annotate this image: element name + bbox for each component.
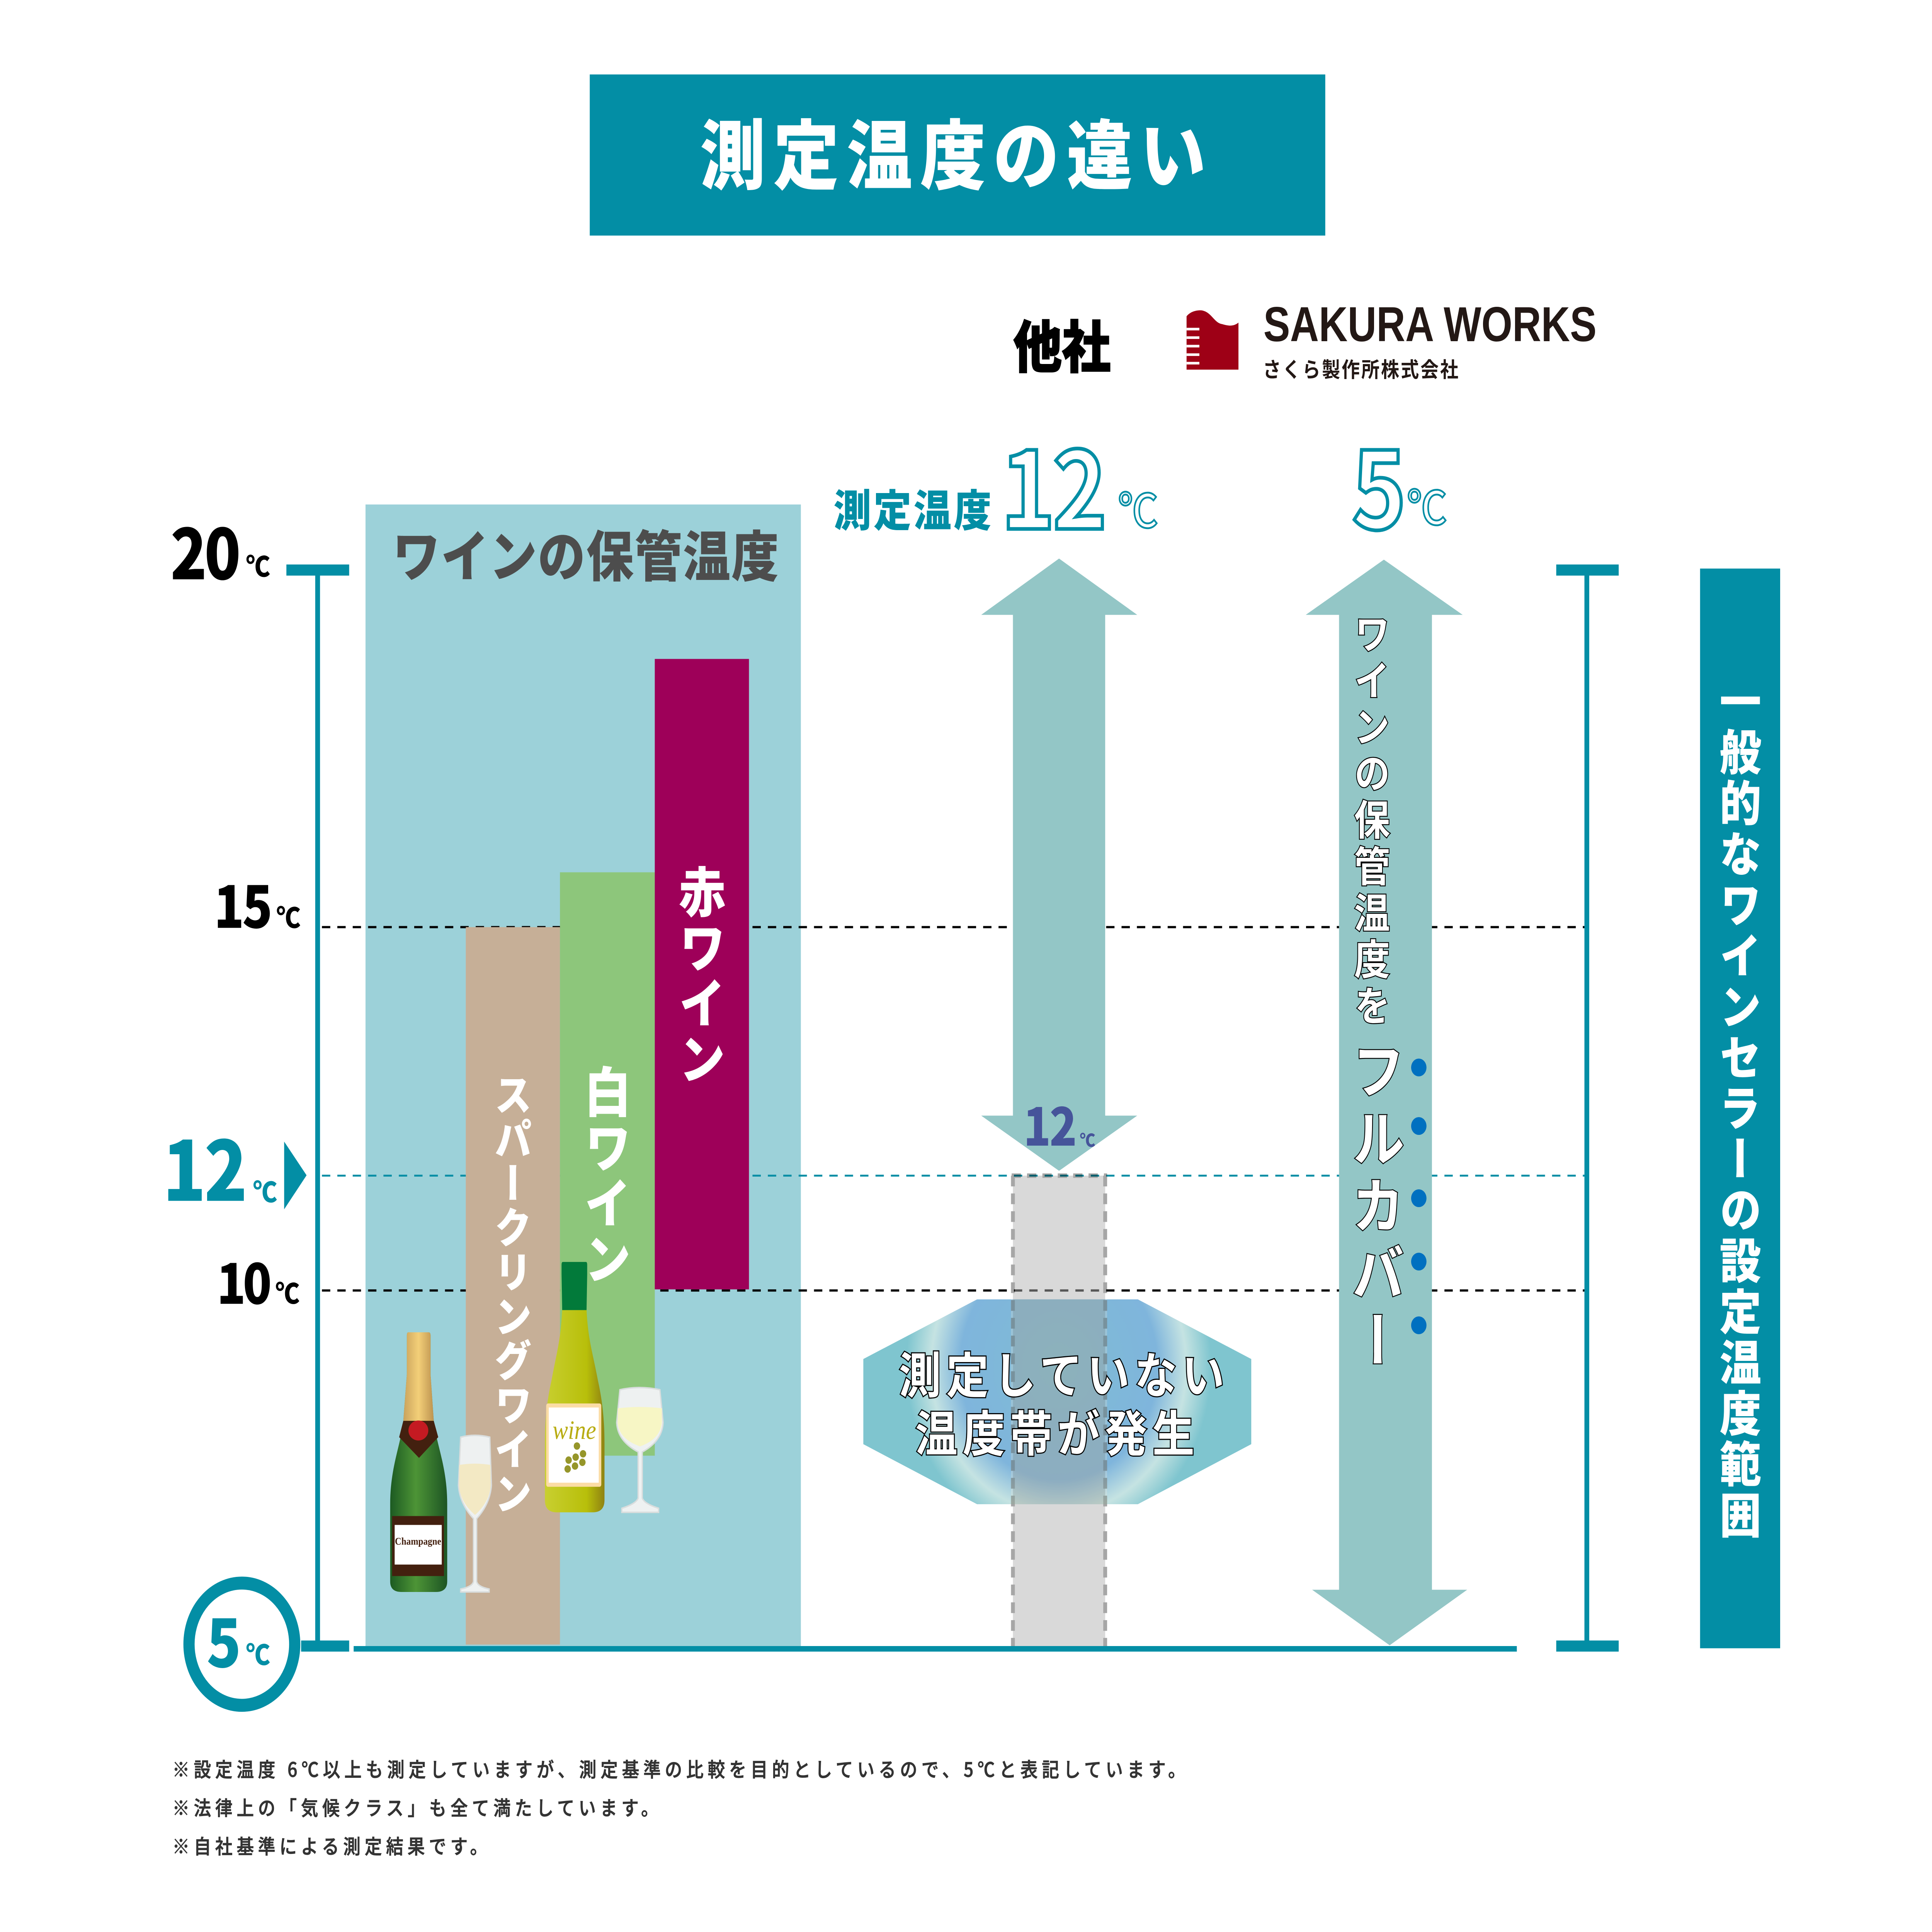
measured temperature label: other company: 測定温度 bbox=[833, 476, 994, 539]
axis label: 12 degrees: 12 bbox=[163, 1106, 245, 1225]
label: red wine: 赤ワイン bbox=[668, 864, 736, 1087]
unmeasured column bbox=[1012, 1176, 1107, 1646]
axis label: 5 degrees circle: ℃ bbox=[246, 1633, 270, 1673]
measured temperature label: Sakura Works: ℃ bbox=[1407, 471, 1447, 538]
title: 測定温度の違い bbox=[700, 95, 1213, 205]
column overlap tint over hexagon bbox=[1011, 1299, 1107, 1504]
callout: unmeasured band text bbox=[899, 1337, 1230, 1466]
axis label: 15 degrees bbox=[214, 862, 301, 945]
column overlap tint over 10 degree line bbox=[1015, 1289, 1103, 1292]
measured temperature label: Sakura Works bbox=[1352, 406, 1447, 560]
label: 12 degrees in arrow: 12 bbox=[1024, 1086, 1076, 1161]
label: sparkling wine: スパークリングワイン bbox=[486, 1073, 540, 1516]
axis label: 12 degrees: ℃ bbox=[253, 1170, 277, 1211]
bar: red wine bbox=[655, 659, 749, 1289]
callout: unmeasured band text: 測定していない bbox=[899, 1337, 1230, 1408]
label: 12 degrees in arrow: ℃ bbox=[1080, 1126, 1095, 1152]
axis label: 15 degrees: 15 bbox=[214, 862, 270, 945]
measured temperature label: other company: ℃ bbox=[1118, 474, 1158, 541]
right banner: 一般的なワインセラーの設定温度範囲 bbox=[1710, 677, 1770, 1541]
label: full cover text: フルカバー bbox=[1340, 1040, 1417, 1377]
right axis bbox=[1556, 565, 1619, 1651]
logo: SAKURA WORKS bbox=[1187, 297, 1597, 383]
label: full cover text: ワインの保管温度を bbox=[1346, 613, 1398, 1031]
logo wordmark: SAKURA WORKS bbox=[1264, 297, 1597, 352]
axis label: 5 degrees circle: 5 bbox=[207, 1591, 241, 1686]
axis label: 20 degrees: ℃ bbox=[246, 545, 270, 585]
measured temperature label: Sakura Works: 5 bbox=[1352, 406, 1406, 560]
icon: champagne bottle: Champagne bbox=[395, 1536, 441, 1547]
heading: other companies: 他社 bbox=[1013, 303, 1111, 384]
label: full cover text bbox=[1340, 613, 1417, 1377]
footnotes: ※自社基準による測定結果です。 bbox=[172, 1831, 492, 1860]
icon: champagne bottle bbox=[390, 1332, 447, 1592]
measured temperature label: other company: 12 bbox=[1001, 406, 1104, 560]
footnotes: ※設定温度 6℃以上も測定していますが、測定基準の比較を目的としているので、5℃と表記しています。 bbox=[172, 1753, 1190, 1782]
icon: white wine bottle: wine bbox=[553, 1415, 596, 1445]
label: white wine: 白ワイン bbox=[574, 1065, 642, 1287]
bar: white wine bbox=[560, 872, 655, 1456]
title bbox=[590, 75, 1325, 236]
axis label: 20 degrees: 20 bbox=[170, 500, 239, 600]
dashed line: 12 degrees bbox=[322, 1175, 1587, 1177]
hexagon: unmeasured temperature band bbox=[863, 1299, 1251, 1504]
axis label: 5 degrees circle bbox=[189, 1583, 295, 1705]
axis label: 10 degrees: ℃ bbox=[276, 1272, 299, 1312]
axis label: 12 degrees bbox=[163, 1106, 306, 1225]
bar: sparkling wine bbox=[466, 927, 560, 1645]
footnotes bbox=[172, 1753, 1190, 1860]
axis label: 10 degrees: 10 bbox=[217, 1241, 270, 1320]
icon: white wine glass bbox=[617, 1388, 663, 1512]
axis label: 20 degrees bbox=[170, 500, 270, 600]
measured temperature label: other company bbox=[833, 406, 1158, 560]
arrow: other company range bbox=[981, 559, 1137, 1171]
icon: champagne flute bbox=[458, 1435, 492, 1592]
right banner bbox=[1700, 568, 1780, 1648]
callout: unmeasured band text: 温度帯が発生 bbox=[915, 1395, 1200, 1466]
logo mark bbox=[1187, 310, 1238, 370]
left axis bbox=[286, 565, 349, 1651]
axis label: 10 degrees bbox=[217, 1241, 299, 1320]
baseline bbox=[354, 1646, 1517, 1651]
panel: wine storage temperature background bbox=[366, 505, 801, 1646]
panel heading: ワインの保管温度 bbox=[393, 513, 780, 592]
dashed line: 15 degrees bbox=[322, 926, 1587, 928]
axis label: 15 degrees: ℃ bbox=[276, 896, 301, 936]
dashed line: 10 degrees bbox=[322, 1289, 1587, 1292]
logo company name: さくら製作所株式会社 bbox=[1263, 353, 1460, 383]
footnotes: ※法律上の「気候クラス」も全て満たしています。 bbox=[172, 1792, 663, 1821]
emphasis dots bbox=[1411, 1059, 1427, 1334]
icon: white wine bottle bbox=[545, 1262, 604, 1512]
arrow: Sakura Works range bbox=[1306, 560, 1467, 1645]
